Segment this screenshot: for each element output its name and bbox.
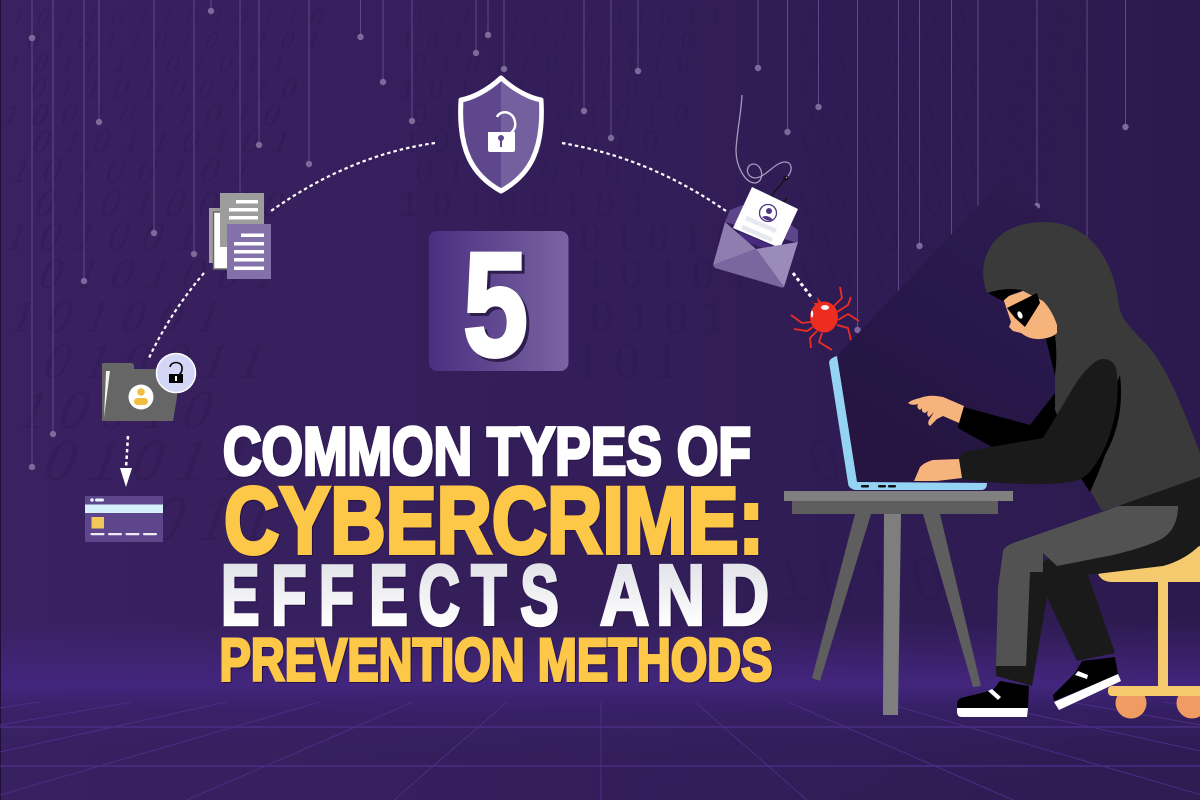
number badge: 5: 5: [466, 226, 531, 390]
word: effects: EFFECTS: [221, 548, 559, 643]
icon: unlocked shield: [461, 78, 541, 191]
far sleeve: [958, 393, 1060, 447]
laptop: [829, 356, 987, 490]
binary digit pattern: 1010101101: [791, 73, 1082, 105]
binary digit pattern: [0, 4, 1136, 615]
binary digit pattern: 0101001: [32, 249, 299, 298]
hood and torso: [983, 222, 1200, 511]
light trouser leg: [996, 506, 1178, 666]
binary digit pattern: 101010110101: [793, 28, 1108, 54]
far shoe: [1053, 657, 1121, 710]
binary digit pattern: 01010010: [29, 183, 305, 225]
number badge: 5: [429, 222, 568, 390]
chair: [1098, 546, 1200, 718]
binary digit pattern: 01011010110: [411, 49, 706, 78]
binary digit pattern: 010101: [818, 290, 1062, 343]
hair: [988, 289, 1023, 301]
icon: red bug: [791, 287, 859, 350]
arrow: folder to card: [120, 436, 132, 487]
binary digit pattern: 101: [575, 334, 692, 390]
title line 3: [221, 548, 769, 643]
binary digit pattern: 01010110: [800, 151, 1067, 191]
binary digit pattern: 10100101: [400, 183, 661, 225]
binary digit pattern: 0110101101011: [409, 4, 737, 30]
binary digit pattern: 0101101010: [412, 97, 704, 132]
title: [220, 414, 772, 694]
word: and: AND: [600, 548, 769, 643]
title line 1: COMMON TYPES OF: [223, 414, 751, 490]
binary digit pattern: 1011: [95, 484, 300, 555]
binary digit pattern: 01010: [580, 213, 750, 259]
face: [1003, 291, 1057, 339]
near shoe: [957, 681, 1029, 717]
number badge: 5: 5: [463, 222, 528, 388]
binary digit pattern: 101010: [804, 333, 1059, 390]
binary digit pattern: 01010: [800, 427, 1037, 494]
binary digit pattern: 00101: [829, 380, 1055, 441]
binary digit pattern: 101001: [2, 291, 243, 343]
binary digit pattern: 01011: [35, 428, 275, 494]
screen light beam: [837, 176, 1070, 482]
binary digit pattern: 0110100110: [26, 73, 316, 105]
near hand: [914, 459, 962, 481]
binary digit pattern: 010110101: [27, 124, 310, 160]
binary digit pattern: 0101101011010: [804, 6, 1136, 31]
binary digit pattern: 1011011010110: [8, 6, 341, 31]
figure: hooded hacker: [908, 222, 1200, 717]
icon: phishing envelope: [713, 187, 798, 288]
binary digit pattern: 010110101101: [23, 28, 338, 54]
binary digit pattern: 01101010110: [804, 49, 1105, 78]
far hand: [908, 396, 964, 426]
mask: [1007, 293, 1040, 327]
icon: documents: [209, 193, 271, 279]
binary digit pattern: 0101: [590, 291, 738, 343]
binary digit pattern: 01100101: [415, 150, 668, 190]
title line 4: PREVENTION METHODS: [220, 626, 772, 694]
binary digit pattern: 10101101011: [3, 49, 304, 78]
binary digit pattern: 101010110: [790, 124, 1072, 160]
binary digit pattern: 1010010: [0, 214, 254, 260]
table: [784, 491, 1013, 715]
binary digit pattern: 0101010: [801, 214, 1058, 260]
floor grid: [0, 702, 1200, 800]
icon: phishing hook and line: [736, 95, 791, 202]
dark trousers and hips: [996, 477, 1200, 686]
binary digit pattern: 10110101: [786, 182, 1063, 225]
binary digit pattern: 0101101010: [802, 97, 1104, 132]
binary digit pattern: 10010: [9, 380, 237, 441]
neck: [1045, 330, 1060, 380]
binary digit pattern: 1010110101: [399, 73, 682, 105]
binary digit pattern: 10101: [585, 249, 763, 298]
binary digit pattern: 010011: [36, 333, 289, 390]
icon: folder with open lock: [102, 354, 196, 421]
connector: dashed arcs: [149, 143, 812, 358]
binary digit pattern: 101011010: [401, 124, 674, 160]
binary digit pattern: 1001011010: [0, 97, 300, 132]
binary digit pattern: 101101011010: [399, 28, 708, 54]
binary digit pattern: 10100101: [5, 151, 272, 191]
binary digit pattern: 1011010: [784, 249, 1051, 298]
title line 2: CYBERCRIME:: [224, 468, 764, 574]
icon: credit card: [85, 496, 163, 542]
near sleeve: [959, 359, 1118, 484]
black inner arm: [1080, 375, 1121, 492]
hanging data lines with dots: [29, 0, 1129, 470]
binary digit pattern: 1010: [766, 544, 966, 615]
